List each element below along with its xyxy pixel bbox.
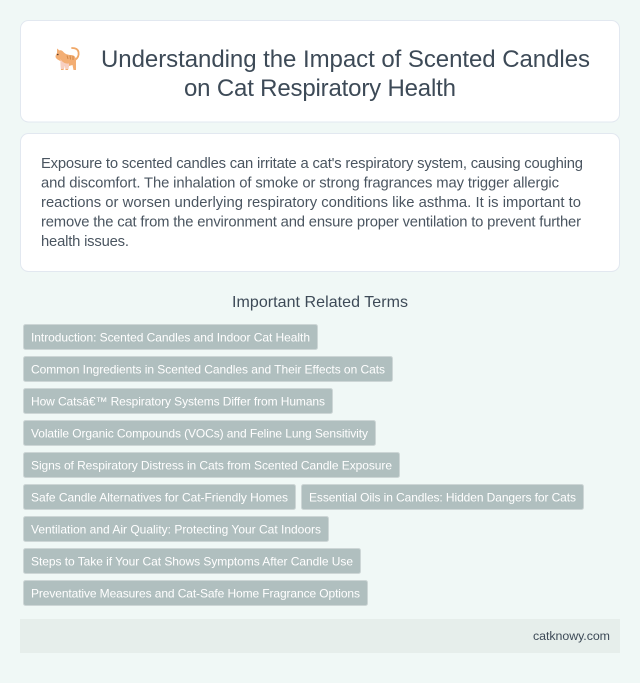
tag (24, 356, 392, 382)
footer: catknowy.com (533, 629, 610, 643)
tag: Essential Oils in Candles: Hidden Dangers for Cats (309, 490, 576, 504)
tag (24, 548, 360, 574)
title: Understanding the Impact of Scented Candles (101, 46, 590, 73)
tag: Signs of Respiratory Distress in Cats from Scented Candle Exposure (31, 458, 392, 472)
tag: Volatile Organic Compounds (VOCs) and Feline Lung Sensitivity (31, 426, 368, 440)
panel: description (20, 134, 620, 272)
title: on Cat Respiratory Health (184, 75, 456, 102)
footer (20, 619, 620, 653)
text block: description: reactions or worsen underlying respiratory conditions like asthma. It is important to (41, 195, 581, 211)
text block: description: and discomfort. The inhalation of smoke or strong fragrances may trigger allergic (41, 176, 560, 192)
tag: Preventative Measures and Cat-Safe Home Fragrance Options (31, 586, 360, 600)
tag (24, 580, 368, 606)
title (101, 46, 590, 102)
text block: description (41, 156, 583, 250)
tag: Safe Candle Alternatives for Cat-Friendly Homes (31, 490, 288, 504)
tag: Introduction: Scented Candles and Indoor Cat Health (31, 330, 310, 344)
text block: description: Exposure to scented candles can irritate a cat's respiratory system, causing coughing (41, 156, 583, 172)
tag: Steps to Take if Your Cat Shows Symptoms After Candle Use (31, 554, 353, 568)
panel: title card (20, 20, 620, 122)
tag (24, 324, 318, 350)
tag list (24, 324, 584, 606)
tag (24, 452, 400, 478)
tag (24, 420, 376, 446)
tag (302, 484, 584, 510)
heading: important related terms: Important Related Terms (232, 294, 408, 311)
text block: description: health issues. (41, 234, 129, 250)
tag (24, 388, 332, 414)
text block: description: remove the cat from the environment and ensure proper ventilation to prevent further (41, 214, 581, 230)
tag: Common Ingredients in Scented Candles and Their Effects on Cats (31, 362, 385, 376)
tag (24, 484, 296, 510)
tag: How Catsâ€™ Respiratory Systems Differ from Humans (31, 394, 325, 408)
tag: Ventilation and Air Quality: Protecting Your Cat Indoors (31, 522, 321, 536)
icon: cat (56, 48, 79, 70)
tag (24, 516, 328, 542)
